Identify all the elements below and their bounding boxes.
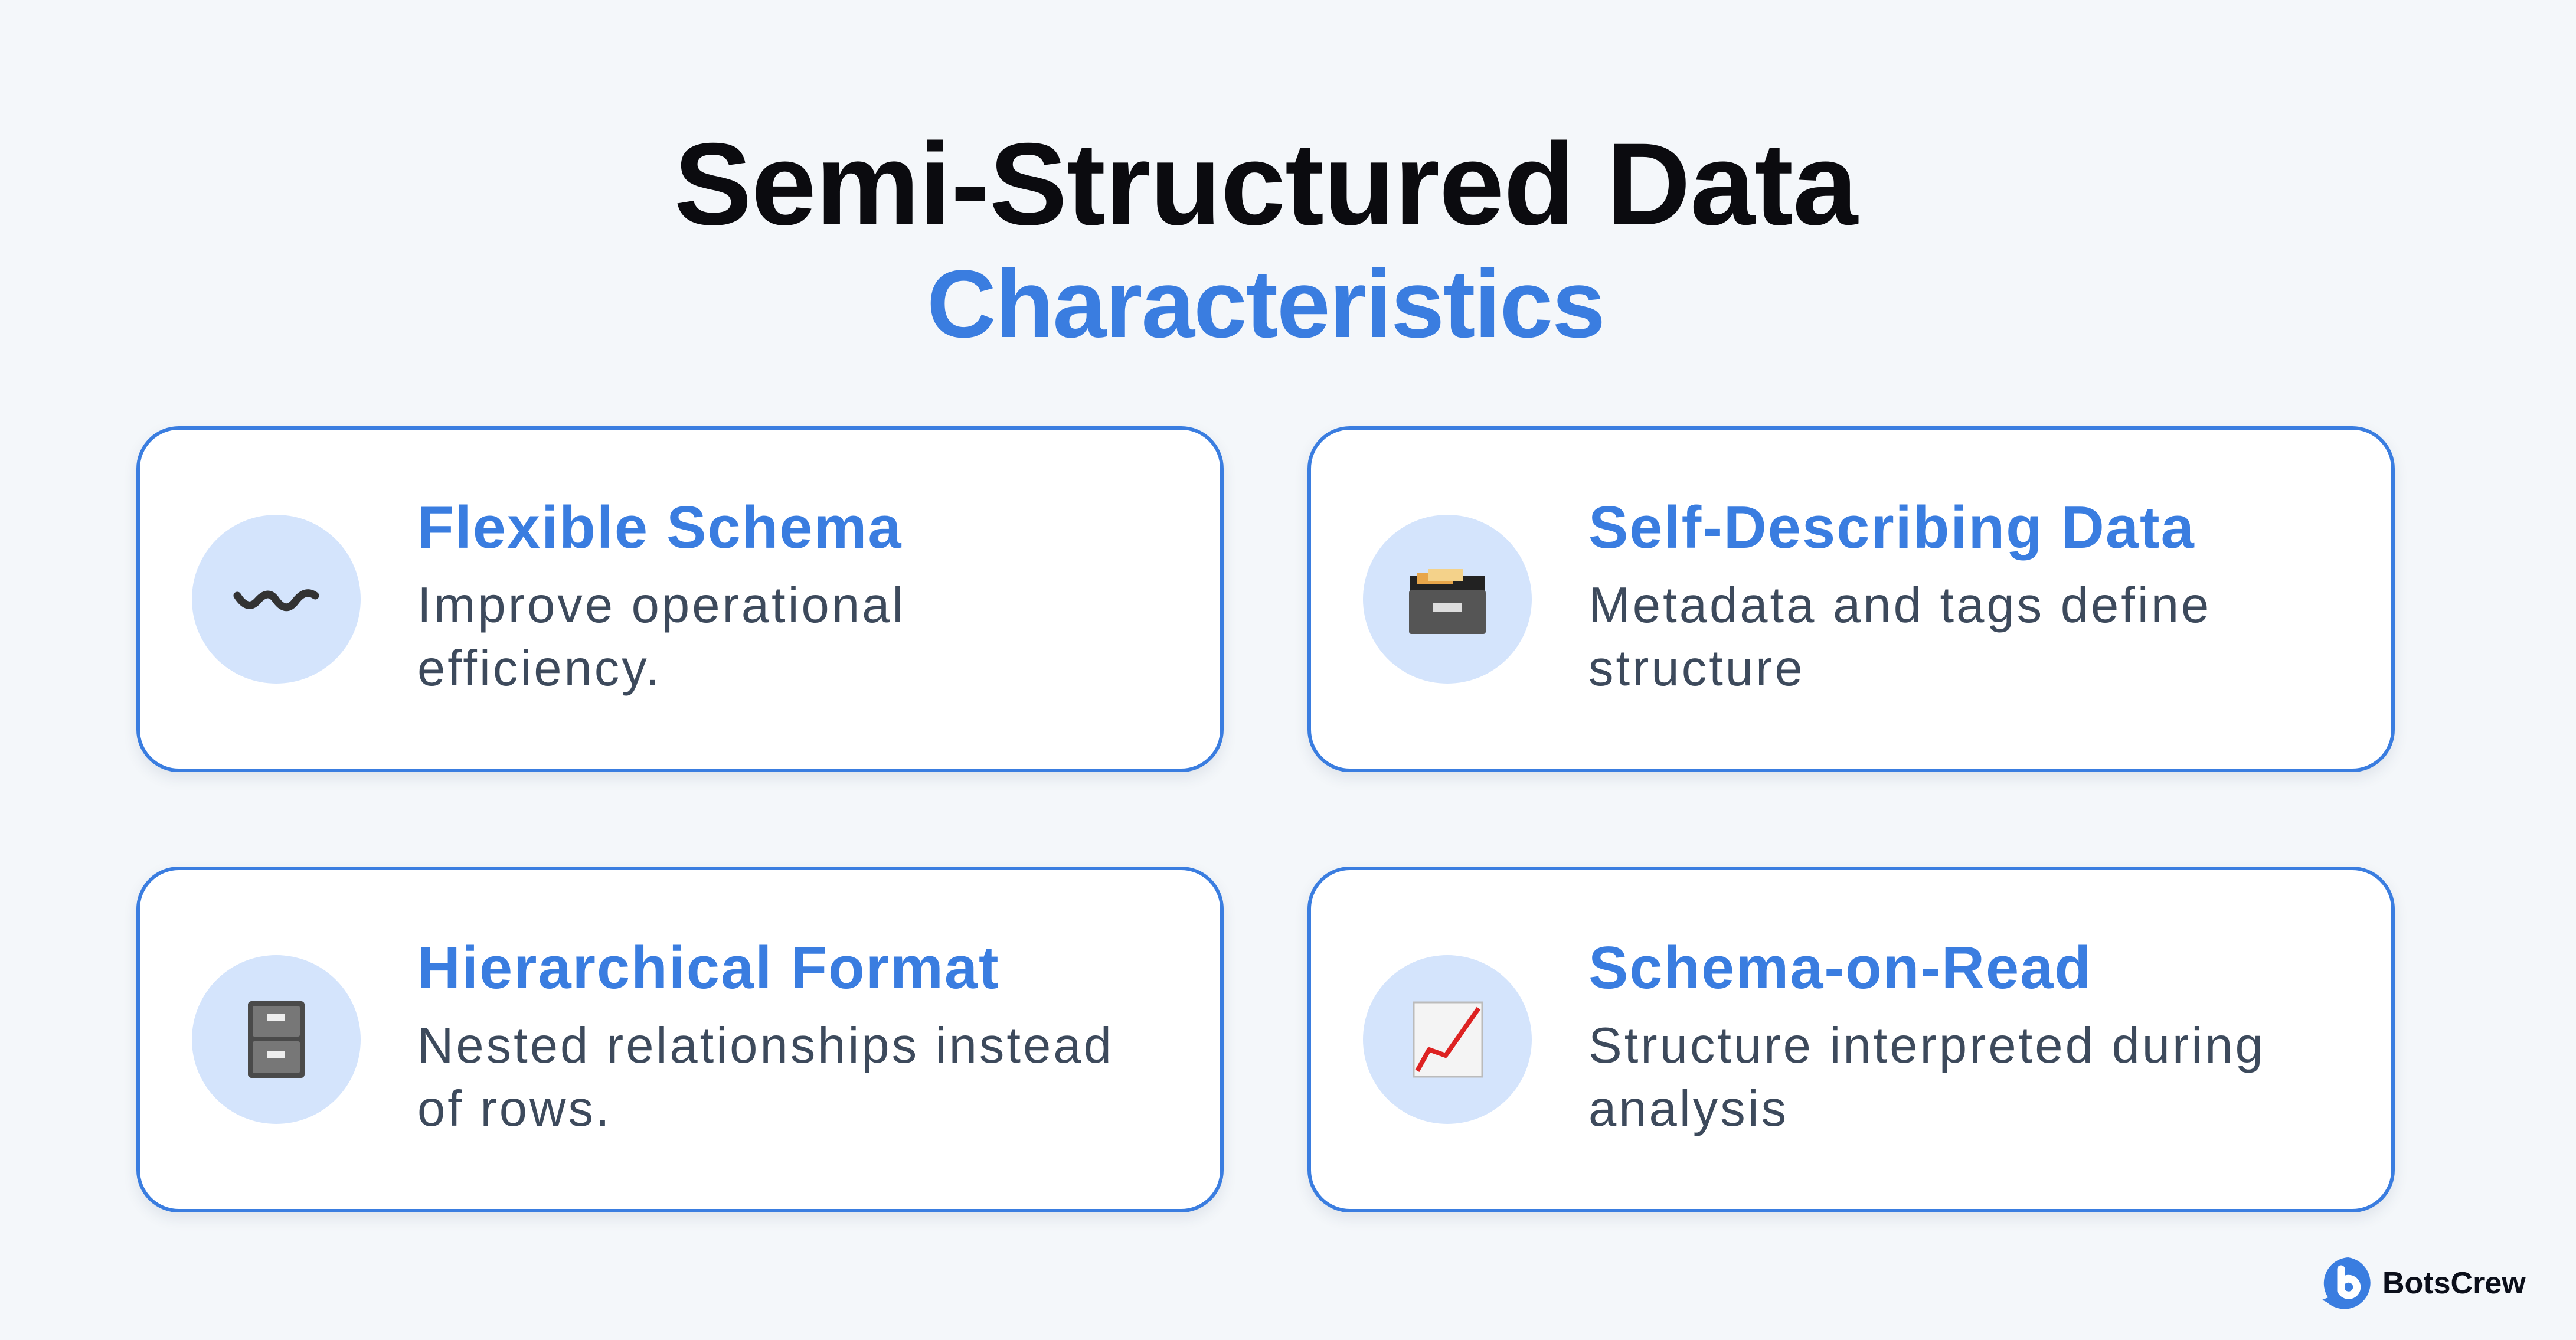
heading: Self-Describing Data (1588, 495, 2195, 561)
panel: flexible schema (136, 426, 1224, 772)
icon: file cabinet (192, 955, 361, 1124)
heading: Schema-on-Read (1588, 935, 2092, 1001)
text: Improve operational (417, 577, 905, 633)
text: Nested relationships instead (417, 1018, 1114, 1074)
logo: BotsCrew (2322, 1257, 2526, 1309)
heading: Flexible Schema (417, 495, 903, 561)
text: Structure interpreted during (1588, 1018, 2266, 1074)
panel: schema-on-read (1307, 867, 2395, 1212)
text: of rows. (417, 1081, 612, 1137)
icon: chart (1363, 955, 1532, 1124)
text: Metadata and tags define (1588, 577, 2211, 633)
subtitle: Characteristics (927, 250, 1604, 358)
text: structure (1588, 640, 1805, 697)
text (1588, 1018, 2266, 1137)
heading: Hierarchical Format (417, 935, 1000, 1001)
panel: hierarchical format (136, 867, 1224, 1212)
icon: card file box (1363, 515, 1532, 684)
title: Semi-Structured Data (674, 119, 1857, 249)
logo: BotsCrew: BotsCrew (2382, 1266, 2526, 1300)
text (417, 1018, 1114, 1137)
text: analysis (1588, 1081, 1789, 1137)
icon: wave (192, 515, 361, 684)
text (417, 577, 905, 697)
text (1588, 577, 2211, 697)
text: efficiency. (417, 640, 662, 697)
panel: self-describing data (1307, 426, 2395, 772)
